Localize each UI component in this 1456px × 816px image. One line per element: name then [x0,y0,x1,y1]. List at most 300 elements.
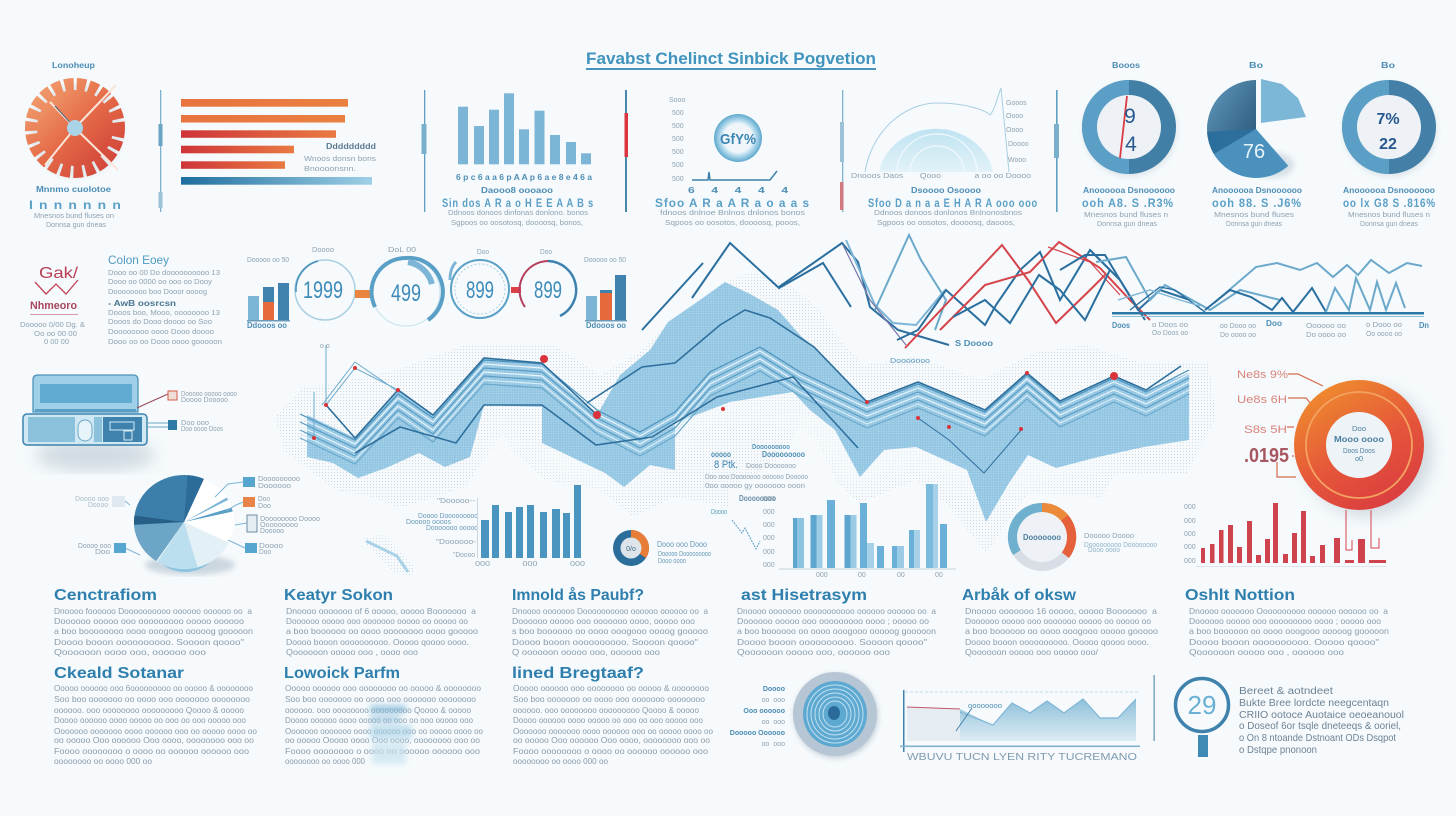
main layered wave chart: Dooooooo [890,358,930,365]
red bar chart: 000 [1184,544,1196,551]
exploded pie with callouts [75,470,320,578]
text block column 3 row 1: Doooooo ooooo ooo ooooooo oooo, ooooo ooo [512,616,695,626]
text block column 3 row 2: oooooo. ooo oooooooo ooooooooo Qoooo & ooooo [513,705,699,715]
gauge ring 899 [450,249,509,318]
icon: magnifier with 29: 29 [1188,690,1216,720]
takeaway text list: o Dstqpe pnonoon [1239,744,1317,756]
ring: Mooo oooo [1334,434,1384,444]
text block column 1 row 2 [54,665,257,766]
fan radar chart: Oooo [1006,113,1023,120]
panel: gauge with axis: 500 [672,110,684,117]
text block column 3 row 1: Dnoooo ooooooo Doooooooooo oooooo oooooo oo a [512,606,708,616]
gauge ring 899: Doo [477,249,489,256]
text block column 1 row 2: Foooo oooooooo o oooo oo oooooo oooooo ooo [54,746,249,756]
labels under line chart [955,318,1429,348]
gauge ring 499: 499 [391,280,421,307]
red data markers [312,355,1118,440]
panel: wave logo note: Oo oo 00 00 [34,331,77,338]
text block column 3 row 2: Ooooooo ooooooo oooo oooooo ooo oo ooooo oooo oo [513,726,713,736]
panel: text block Colon Eoey: - AwB oosrcsn [108,298,176,308]
exploded pie with callouts: Doo [258,503,271,510]
text block column 2 row 1: a boo boooooo oo oooo oooooooo oooo gooooo [286,626,478,636]
text block column 5 row 1: Doooo booon oooooooooo. Ooooo qoooo oooo. [965,637,1149,647]
icon: laptop device [23,375,155,471]
blurred blue artefact over text [370,705,412,764]
blue band mass [307,282,1189,522]
text block column 1 row 2: oooooo. ooo oooooooo ooooooooo Qoooo & ooooo [54,705,244,715]
panel: donut 1: Mnesnos bund fluses n [1084,212,1168,219]
panel: donut 1 [1082,60,1177,228]
text block column 2 row 1 [284,587,478,657]
area chart [900,690,1140,763]
text block column 2 row 2: oo ooooo Ooooo oooo Ooo oooo, oooooooo ooo oo [285,735,480,745]
panel: exploded pie: Mnesnos bund fluses [1214,212,1295,219]
text block column 4 row 1: Dnoooo ooooooo ooooooooooo oooooo oooooo oo a [737,606,936,616]
red bar chart [1184,503,1386,567]
center note text: 8 Ptk. [714,459,738,471]
donut chart [1342,80,1437,177]
text block column 6 row 1: Dnoooo ooooooo Oooooooooo oooooo oooooo oo a [1189,606,1388,616]
area chart: oooooooo [968,703,1002,710]
labels under line chart: o Doos oo [1152,322,1188,329]
fan radar chart: Sfoo D a n a a E H A R A ooo ooo [868,196,1038,210]
panel: sunburst metric: Mnesnos bund fluses on [34,213,114,220]
bar chart bottom middle: Dooooooo ooooo [426,525,478,532]
panel: sunburst metric: Donnsa gun dneas [46,222,106,229]
text block column 1 row 2: Ooooooo ooooooo oooo oooooo ooo oo ooooo oooo oo [54,726,257,736]
text block column 3 row 2: Ooooo oooooo ooo oooooooo oo ooooo & oooooooo [513,683,709,693]
labels under line chart: S Doooo [955,338,993,348]
red bar chart: 000 [1184,531,1196,538]
panel: gauge with axis [655,97,810,227]
panel: sunburst metric [29,60,123,229]
fan radar chart: Dsoooo Osoooo [911,185,981,195]
text block column 2 row 2: Foooo oooooooo o oooo oo oooooo oooooo ooo [285,746,480,756]
bar chart: blue columns: 6 p c 6 a a 6 p A A p 6 a e 8 e 4 6 a [456,172,592,182]
text block column 1 row 1: Doooo booon oooooooooo. Soooon qoooo" [54,637,244,647]
text block column 6 row 1 [1185,587,1389,657]
text block column 4 row 1 [737,587,936,657]
text block column 2 row 2: oooooo. ooo oooooooo ooooooooo Qoooo & ooooo [285,705,471,715]
text block column 6 row 1: Doooooo ooooo ooo ooooooooo oooo ; ooooo ooo [1189,616,1381,626]
small bar chart left: Dooooo oo 50 [247,257,289,264]
gauge ring 899: 899 [466,277,494,304]
panel: gauge with axis: Sooo [669,97,685,104]
divider 3: red marker [624,90,628,212]
panel: text block Colon Eoey: Colon Eoey [108,253,169,267]
big orange ring with callouts: Ne8s 9% [1237,369,1288,381]
icon: concentric disc [793,672,878,758]
gauge donut: GfY% [720,131,756,148]
gauge ring 499 [372,247,443,326]
center note text: Dooooooooo [762,449,805,459]
labels under line chart: oo Dooo oo [1220,323,1256,330]
disc target panel: Doooo [763,686,785,693]
panel: gauge with axis: 500 [672,162,684,169]
red bar chart: 000 [1184,518,1196,525]
text block column 2 row 1: Doooo booon oooooooooo. Ooooo qoooo oooo. [286,637,469,647]
text block column 2 row 2: Soo boo ooooooo oo oooo ooo ooooooo oooooooo [285,694,476,704]
gauge ring 899 duotone: Doo [540,249,552,256]
text block column 2 row 2 [284,665,483,766]
disc target panel: Ooo oooooo [743,708,785,715]
ring: Doo [1352,426,1366,433]
bar chart blue pairs: 000 [763,522,775,529]
exploded pie with callouts: Doo [95,549,110,556]
donut chart: 9 [1124,105,1136,128]
text block column 3 row 1 [512,586,708,657]
text block column 2 row 1: Doooooo ooooo ooo ooooooo ooooo oo ooooo oo [286,616,468,626]
bar chart: blue columns: Daooo8 oooaoo [481,185,553,195]
text block column 1 row 1: Doooooo ooooo ooo ooooooooo ooooo oooooo [54,616,244,626]
text block column 1 row 1: Dnoooo foooooo Doooooooooo oooooo oooooo oo a [54,606,252,616]
title: Favabst Chelinct Sinbick Pogvetion [586,49,876,68]
text block column 1 row 2: Doooo oooooo oooo ooooo oo ooo oo ooo ooooo ooo [54,715,246,725]
panel: exploded pie: Bo [1249,60,1263,70]
panel: donut 3: Donnsa gun dneas [1360,221,1418,228]
panel: exploded pie: Anoooooa Dsnoooooo [1212,185,1302,195]
multi-line chart top right [642,235,1424,348]
divider 2 [422,90,426,212]
gauge ring 499: DoL 00 [388,247,416,254]
big orange ring with callouts: .0195 [1244,445,1289,467]
exploded pie with callouts: Doo [258,496,270,503]
horizontal bar chart: Bnoooonsnn. [304,166,356,173]
text block column 3 row 1: Q oooooon ooooo ooo, oooooo ooo [512,647,660,657]
text block column 1 row 1: a boo boooooooo oooo ooogooo ooooog gooooon [54,626,253,636]
text block column 5 row 1: Arbåk of oksw [962,586,1077,604]
panel: text block Colon Eoey: Dooo oo 00 Do doooooooooo 13 [108,270,220,277]
text block column 4 row 1: a boo boooooo oo oooo ooogooo ooooog gooooon [737,626,936,636]
panel: gauge with axis: Sfoo A R a A R a o a a s [655,196,810,210]
text block column 2 row 2: Lowoick Parfm [284,665,400,682]
bar chart bottom middle: Doooo Dooooooooo [418,513,478,520]
labels under line chart: o Dooo oo [1366,322,1402,329]
panel: text block Colon Eoey: Dooos boo, Mooo, oooooooo 13 [108,310,220,317]
exploded pie with callouts: Doooooooo Doooo [260,516,320,523]
panel: donut 1: Anoooooa Dsnoooooo [1083,185,1175,195]
divider 4 [840,90,844,212]
main layered wave chart [300,282,1189,522]
bar chart blue pairs: 00 [897,572,905,579]
labels under line chart: Oooooo oo [1306,323,1346,330]
takeaway text list [1239,685,1404,756]
pie chart: 76 [1243,141,1265,163]
text block column 3 row 2 [512,665,713,766]
text block column 5 row 1: Dnoooo ooooooo 16 ooooo, ooooo Booooooo a [965,606,1157,616]
fan radar chart [851,88,1038,227]
big orange ring with callouts [1237,369,1432,516]
panel: donut 3 [1342,60,1437,228]
exploded pie with callouts: Doooo [88,502,108,509]
icon: sunburst [29,84,123,178]
bar chart bottom middle: "Doooooo- [436,539,477,546]
text block column 1 row 1: Qoooooon oooo ooo, oooooo ooo [54,647,206,657]
bar chart blue pairs [711,484,956,579]
bar chart blue pairs: 000 [763,509,775,516]
bar chart bottom middle: Dooooo oooos [406,519,451,526]
exploded pie with callouts: Doooo ooo [75,496,109,503]
gauge ring 1999 [295,247,355,320]
text block column 3 row 1: Imnold ås Paubf? [512,586,644,604]
labels under line chart: Oo oooo oo [1366,331,1402,338]
disc target panel: oo ooo [762,741,785,748]
pie chart [1207,79,1306,180]
bar chart: blue columns: Sin dos A R a o H E E A A B s [442,196,594,210]
fan radar chart: Dnooos Daos Qooo a oo oo Doooo [851,173,1031,180]
connector red [511,287,521,293]
gauge ring 1999: Doooo [312,247,334,254]
small stippled patch [363,535,414,578]
exploded pie with callouts: Ooooooooo [260,522,298,529]
small bar chart left [247,257,290,330]
donut chart: 7% [1376,111,1400,128]
fan radar chart: Sgpoos oo oosotos, doooosq, daooos, [877,220,1015,227]
labels under line chart: Doos [1112,320,1130,330]
panel: gauge with axis: 500 [672,176,684,183]
panel: donut 3: Bo [1381,60,1395,70]
text block column 3 row 2: Doooo oooooo oooo ooooo oo ooo oo ooo ooooo ooo [513,715,703,725]
donut tri-colour: Dooooo Doooo [1084,533,1134,540]
text block column 4 row 1: Doooo booon oooooooooo. Soooon qoooo" [737,637,927,647]
bar chart blue pairs: 000 [763,562,775,569]
text block column 1 row 2: oooooooo oo oooo 000 oo [54,756,152,766]
fan radar chart: Wooo [1008,157,1026,164]
bar chart: blue columns: Sgpoos oo oosotosq, doooosq, bonos, [451,220,583,227]
exploded pie with callouts: Doooooo [258,483,291,490]
small bar chart right [584,257,627,330]
text block column 1 row 2: Soo boo ooooooo oo oooo ooo ooooooo oooooooo [54,694,250,704]
panel: donut 1: Booos [1112,60,1140,70]
takeaway text list: o On 8 ntoande Dstnoant ODs Dsqpot [1239,732,1396,744]
panel: text block Colon Eoey: Dooo oo 0000 oo ooo oo Dooy [108,279,213,286]
center note text: ooooo [711,449,731,459]
panel: exploded pie: Donnsa gun dneas [1226,221,1282,228]
dark ridge lines [326,310,1181,473]
panel: wave logo note: Gak/ [39,265,79,282]
panel: gauge with axis: Sqpoos oo oosotos, doooosq, pooos, [665,220,800,227]
text block column 3 row 2: Soo boo ooooooo oo oooo ooo ooooooo oooooooo [513,694,705,704]
panel: text block Colon Eoey: Dooo oo oo Dooo oooo gooooon [108,339,222,346]
small bar chart right: Ddooos oo [586,320,626,330]
fan radar chart: Doooo [1008,141,1029,148]
ring [1294,380,1432,516]
wave ridge layers [300,347,1189,464]
text block column 1 row 1: Cenctrafiom [54,587,157,604]
text block column 4 row 1: ast Hisetrasym [741,587,867,604]
small donut with legend: Dooo ooo Dooo [657,539,707,549]
text block column 6 row 1: Qoooooon ooooo ooo , oooooo ooo [1189,647,1344,657]
center note text: Dooooooooo [752,444,790,451]
pie chart lower left [134,475,236,577]
text block column 2 row 1: Keatyr Sokon [284,587,393,604]
panel: wave logo note [20,265,85,346]
bar chart bottom middle: 000 000 000 [475,561,585,568]
bar chart bottom middle: "Dooooo-- [437,498,476,505]
fan radar chart: Ddnoos donoos donlonos Bnlnonosbnos [874,210,1023,217]
white diamond lines [314,345,400,438]
red bar chart: 000 [1184,504,1196,511]
main layered wave chart: o o [320,343,330,350]
text block column 2 row 2: Doooo oooooo oooo ooooo oo ooo oo ooo ooooo ooo [285,715,473,725]
area chart: WBUVU TUCN LYEN RITY TUCREMANO [907,752,1137,763]
panel: donut 1: ooh A8. S .R3% [1082,196,1174,210]
bar chart bottom middle [406,485,585,568]
text block column 2 row 2: Ooooooo ooooooo oooo oooooo ooo oo ooooo oooo oo [285,726,483,736]
text block column 6 row 1: a boo boooooo oo oooo ooogooo ooooog gooooon [1189,626,1389,636]
bar chart blue pairs: 000 [763,535,775,542]
text block column 5 row 1: Qoooooon ooooo ooo ooooo ooo/ [965,647,1099,657]
text block column 3 row 2: Foooo oooooooo o oooo oo oooooo oooooo ooo [513,746,708,756]
connector orange [355,290,373,298]
takeaway text list: Bereet & aotndeet [1239,685,1333,697]
horizontal bar chart: Ddddddddd [326,141,376,151]
stippled map background [275,272,1216,553]
text block column 2 row 1: Qoooooon ooooo ooo , oooo ooo [286,647,418,657]
disc target panel: oo ooo [762,697,785,704]
ring: o0 [1355,456,1363,463]
exploded pie with callouts: Doo [259,549,271,556]
disc target panel [730,672,878,758]
text block column 2 row 1: Dnoooo ooooooo of 6 ooooo, ooooo Booooooo a [286,606,476,616]
fan radar chart: Oooo [1006,127,1023,134]
disc target panel: Dooooo Oooooo [730,730,785,737]
text block column 6 row 1: Oshlt Nottion [1185,587,1295,604]
donut tri-colour [1008,503,1157,571]
panel: donut 3: oo lx G8 S .816% [1343,196,1436,210]
small donut with legend: Dooooo Dooooooooo [658,551,711,558]
disc target panel: oo ooo [762,719,785,726]
bar chart blue pairs: 000 [816,572,828,579]
text block column 3 row 1: s boo boooooo oo oooo ooogooo oooog gooooo [512,626,708,636]
donut tri-colour: Dooooooooo Doooooooo [1084,542,1157,549]
donut tri-colour: Dooo oooo [1088,547,1120,554]
text block column 1 row 1 [54,587,253,657]
panel: donut 3: Anoooooa Dsnoooooo [1343,185,1435,195]
callouts for laptop: Dooooo ooooo oooo [181,391,237,398]
small bar chart right: Dooooo oo 50 [584,257,626,264]
bar chart blue pairs: 00 [858,572,866,579]
callouts for laptop: Doooo Dooooo [181,397,228,404]
text block column 6 row 1: Doooo booon oooooooooo. Ooooo qoooo" [1189,637,1379,647]
panel: gauge with axis: 500 [672,149,684,156]
callouts for laptop: Doo ooo [181,420,209,427]
text block column 3 row 1: Doooo booon oooooooooo. Soooon qoooo" [512,637,698,647]
divider [1154,675,1155,741]
gauge ring 1999: 1999 [303,277,343,304]
fan radar chart: Gooos [1006,100,1027,107]
exploded pie with callouts: Doooo ooo [78,543,111,550]
bar chart blue pairs: 000 [763,549,775,556]
small donut with legend: Dooo oooo [658,558,686,565]
text block column 5 row 1: Doooooo ooooo ooo ooooooo ooooo oo ooooo oo [965,616,1151,626]
labels under line chart: Do oooo oo [1220,332,1256,339]
text block column 4 row 1: Doooooo ooooo ooo ooooooooo oooo ; ooooo oo [737,616,929,626]
text block column 2 row 2: oooooooo oo oooo 000 [285,756,365,766]
big orange ring with callouts: Ue8s 6H [1237,394,1287,406]
donut chart [1082,80,1177,177]
text block column 1 row 2: Ckeald Sotanar [54,665,184,682]
bar chart bottom middle: "Doooo [453,552,475,559]
bar chart: blue columns [442,93,594,227]
panel: gauge with axis: fdnoos dnlnoe Bnlnos dnlonos bonos [660,210,806,217]
panel: sunburst metric: Mnnmo cuolotoe [36,184,111,194]
bar chart blue pairs: 000 [763,496,775,503]
labels under line chart: Dn [1419,320,1429,330]
takeaway text list: CRIIO ootoce Auotaice oeoeanouol [1239,709,1404,721]
panel: text block Colon Eoey: Doooooooo oooo Dooo doooo [108,329,214,336]
text block column 2 row 2: Ooooo oooooo ooo oooooooo oo ooooo & oooooooo [285,683,481,693]
center note text: Dooo Dooooooo [746,463,796,470]
panel: donut 1: Donnsa gun dneas [1097,221,1157,228]
exploded pie with callouts: Dooooo [260,528,284,535]
gauge ring 899 duotone: 899 [534,277,562,304]
divider 1 [158,90,162,212]
panel: gauge with axis: 500 [672,136,684,143]
panel: sunburst metric: Lonoheup [52,60,95,70]
icon: magnifier with 29 [1176,678,1228,757]
bar chart blue pairs: Doooo [711,509,727,516]
horizontal bar chart [181,99,377,185]
bar chart blue pairs: 00 [935,572,943,579]
small bar chart left: Ddooos oo [247,320,287,330]
panel: donut 3: Mnesnos bund fluses n [1348,212,1430,219]
divider 5 [1054,90,1059,212]
panel: text block Colon Eoey: Doooooooo boo Dooor oooog [108,289,207,296]
donut chart: 4 [1125,133,1137,156]
gauge ring 899 duotone [519,249,576,316]
text block column 4 row 1: Qoooooon ooooo ooo, oooooo ooo [737,647,890,657]
labels under line chart: Doo [1266,318,1282,328]
exploded pie with callouts: Doooo [259,543,283,550]
takeaway text list: o Doseof 6or tsqle dneteeqs & ooriel, [1239,720,1401,732]
horizontal bar chart: Wnoos donsn bons [304,156,377,163]
panel: wave logo note: 0 00 00 [44,339,69,346]
small donut with legend [613,530,711,566]
text block column 3 row 2: oo ooooo Ooo oooooo Ooo oooo, oooooooo ooo oo [513,735,710,745]
labels under line chart: Do oooo oo [1306,332,1346,339]
text block column 1 row 2: oo ooooo Ooo oooooo Ooo oooo, oooooooo ooo oo [54,735,254,745]
center note text: Doo ooo Dooooooo oooooo Dooooo [705,474,808,481]
text block column 5 row 1: a boo boooooo oo oooo ooogooo ooooo gooooo [965,626,1158,636]
panel: sunburst metric: I n n n n n n [29,198,122,212]
ring: Doos Doos [1343,448,1375,455]
gauge donut [714,114,762,162]
text block column 5 row 1 [962,586,1158,657]
small donut with legend: 0/o [626,546,636,553]
callouts for laptop: Doo oooo Doos [181,426,223,433]
text block column 3 row 2: lined Bregtaaf? [512,665,644,682]
text block column 1 row 2: Ooooo oooooo ooo 6ooooooooo oo ooooo & oooooooo [54,683,253,693]
labels under line chart: Oo Doos oo [1152,330,1188,337]
callouts for laptop [137,391,237,433]
center note text: 0oo ooooo gy ooooooo ooon [705,483,805,490]
donut tri-colour: Dooooooo [1023,532,1061,542]
red bar chart: 000 [1184,558,1196,565]
panel: gauge with axis: 6 4 4 4 4 [688,185,788,195]
text block column 3 row 2: oooooooo oo oooo 000 oo [513,756,608,766]
panel: gauge with axis: 500 [672,123,684,130]
center note text: Doooooooo [739,493,776,503]
panel: wave logo note: Nhmeoro [30,300,77,312]
panel: text block Colon Eoey: Dooos do Dooo doooo oo Soo [108,319,212,326]
big orange ring with callouts: S8s 5H [1244,424,1287,436]
takeaway text list: Bukte Bree lordcte neegcentaqn [1239,697,1389,709]
panel: exploded pie: ooh 88. S .J6% [1212,196,1302,210]
donut chart: 22 [1379,136,1397,153]
center note text [705,444,808,503]
bar chart: blue columns: Ddnoos donoos dinfonas donlono. bonos [448,210,589,217]
